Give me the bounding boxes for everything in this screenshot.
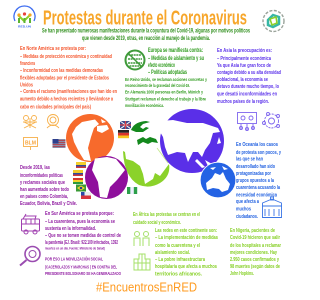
globe: Sudamérica [85,156,128,199]
panel: Oceanía text: necesidad económica [236,192,278,198]
hashtag: #EncuentrosEnRED [96,280,197,294]
panel: Oceanía text: cuarentena acusando la [236,185,281,191]
panel: Oceanía text: ciudadanos. [236,214,258,220]
panel: Europa text: En Alemania 1000 personas en Berlín, Múnich y [125,90,203,96]
panel: Sur América text: – Que no se tomen medidas de control de [45,233,121,239]
panel: África text: En África las protestas se centran en el [133,211,200,218]
panel: Sur América text: PRESIDENTE BOLSONARO SE HA GENERALIZADO [45,271,121,277]
panel: Norte América text: – Inconformidad con las medidas demoradas [20,68,103,74]
panel: Sur América text: POR ESO LA MOVILIZACIÓN SOCIAL [45,255,103,263]
panel: Nigeria text: En Nigeria, pacientes de [230,228,275,234]
panel: Europa text [125,48,207,109]
panel: Europa text: movilización económica. [125,103,164,109]
flags: Reino Unido y Alemania [118,121,131,138]
panel: Asia text: – Principalmente económica [217,56,272,62]
globe: Asia [159,109,224,173]
logo: Encuentros en RED: RED.UN [18,24,31,28]
panel: Desde 2019 text: Desde 2019, las [20,165,50,171]
panel: Oceanía text: grupos opuestos a la [236,178,275,184]
panel: Norte América text: – Contra el racismo (manifestaciones que han ido en [20,89,117,95]
panel: Norte América text: – Medidas de protección económica y continuidad [20,54,112,60]
panel: Europa text: efecto económico [148,63,175,69]
panel: Oceanía text: desarrollado han sido [236,164,275,170]
panel: Sur América text: muertes en un día. Fuente: Ministerio de Salud) [45,246,105,251]
panel: Asia text: En Asia la preocupación es: [217,48,272,54]
panel: Asia text: poblacional, la economía se [217,77,268,83]
panel: Desde 2019 text: Ecuador, Bolivia, Brazil y Chile. [20,201,77,207]
panel: Europa text: Stuttgart reclaman el derecho al trabajo y la libre [125,96,206,102]
globe: Oceanía [200,162,236,198]
logo: Encuentros en RED [14,6,35,29]
panel: Nigeria text: mejores condiciones. Hay [230,250,278,256]
panel: África text: – La implementación de medidas [155,235,218,241]
panel: Europa text: reconocimiento de la gravedad del Covid-19. [125,83,190,89]
subtitle: que vienen desde 2019, otras, en reacción al manejo de la pandemia. [82,36,210,42]
icons: Norte América protest [23,114,59,150]
panel: Europa text: En Reino Unido, se reclaman acciones concretas y [125,77,207,83]
panel: Norte América text: flexibles adoptadas por el presidente de Estados [20,75,109,81]
panel: Asia text: muchos países de la región. [217,99,269,105]
logo: right circular emblem [263,10,284,32]
panel: Oceanía text: las que se han [236,156,263,162]
flag: Estados Unidos [52,139,66,148]
panel: Sur América text: la pandemia (EJ. Brasil: 922.109 infectados, 1392 [45,240,118,246]
panel: Oceanía text: protagonizadas por [236,171,272,177]
globe: Europa y África [123,121,169,187]
panel: Europa text: Europa se manifiesta contra: [148,48,203,54]
panel: África text: – La pobre infraestructura [155,257,206,263]
panel: Sur América text: – La cuarentena, pues la economía se [45,219,115,225]
panel: Europa text: – Políticas adoptadas [148,70,187,76]
panel: África text: cuidado social y económico. [133,220,181,226]
panel: Norte América text: En Norte América se protesta por: [20,46,86,52]
flags: Colombia, Ecuador, Bolivia, Brasil y Chile [73,162,91,199]
panel: Europa text: – Medidas de aislamiento y su [148,56,204,62]
panel: África text: Las redes en este continente son: [155,228,217,234]
globe: Norte América [66,114,114,162]
panel: Oceanía text: muchos [236,206,251,212]
panel: Nigeria text: John Hopkins. [230,271,254,277]
subtitle [42,28,250,42]
panel: Asia text [217,48,281,105]
panel: Desde 2019 text: han aumentado sobre todo [20,187,69,193]
panel: Oceanía text: En Oceanía los casos [236,142,278,148]
panel: Oceanía text [236,142,282,220]
icons: Norte América protest: BLM [25,140,36,146]
panel: Sur América text: (CACEROLAZOS Y MARCHAS ) EN CONTRA DEL [45,264,117,270]
panel: África text: territorios africanos. [155,272,202,278]
icon: Oceanía building [262,197,282,218]
panel: Asia text: Ya que Asia fue gran foco de [217,63,271,69]
panel: Norte América text [20,46,117,110]
panel: Desde 2019 text: inconformidades políticas [20,173,63,179]
icon: no gatherings [126,50,144,70]
panel: África text: hospitalaria que afecta a muchos [155,264,217,270]
flag: Nigeria [127,187,137,194]
panel: Sur América text: En Sur América se protesta porque: [45,211,114,217]
panel: Oceanía text: que afecta a [236,199,260,205]
panel: África text [133,211,218,278]
panel: Norte América text: financiera [20,61,35,67]
panel: Nigeria text [230,228,282,277]
icons: Asia [238,112,280,130]
panel: Norte América text: aumento debido a hechos recientes y lleviándose a [20,97,114,103]
panel: Desde 2019 text [20,165,77,207]
panel: Norte América text: cabo en ciudades principales del país) [20,104,91,110]
panel: África text: aislamiento social. [155,250,190,256]
panel: Desde 2019 text: en países como Colombia, [20,194,68,200]
icons: África people and hospital [134,232,150,270]
icon: magnifier [20,246,40,266]
icon: bus [22,214,40,234]
panel: Sur América text: sustenta en la informalidad. [45,226,96,232]
panel: Desde 2019 text: y reclamos sociales que [20,180,65,186]
panel: África text: como la cuarentena y el [155,243,200,249]
panel: Sur América text [45,211,121,277]
panel: Norte América text: Unidos [20,82,33,88]
